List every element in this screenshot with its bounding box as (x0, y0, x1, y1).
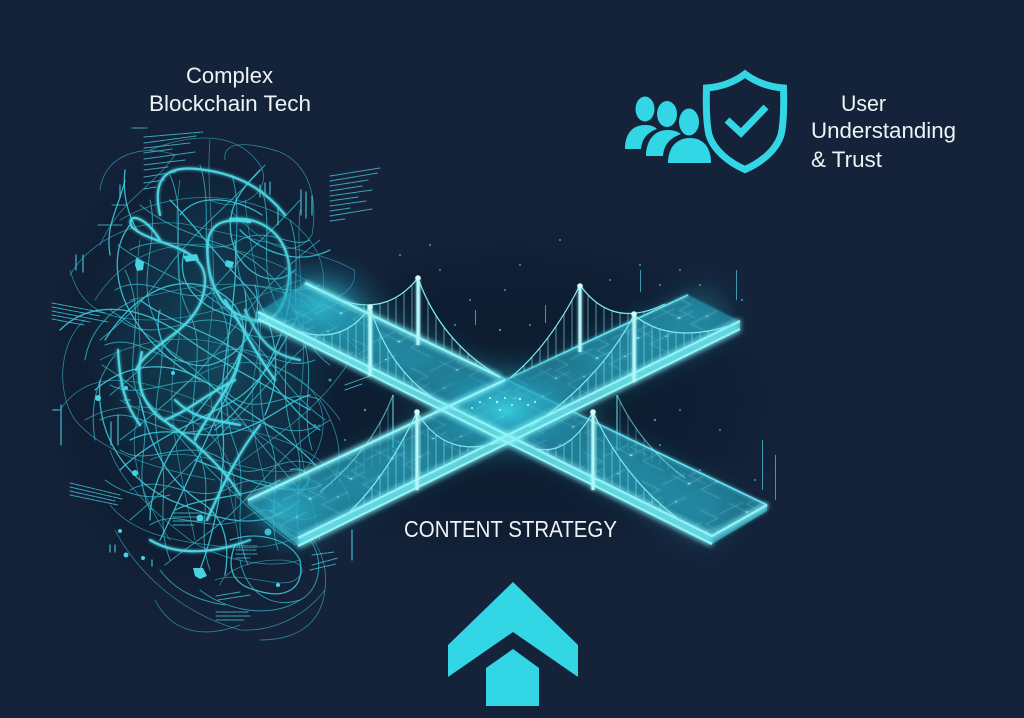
dark halo behind bridge (200, 210, 820, 590)
tower caps (367, 275, 637, 415)
heading: User Understanding & Trust (811, 91, 956, 172)
code text fragments (52, 128, 380, 620)
thin faint strands (60, 138, 360, 640)
pillars behind the decks (393, 395, 617, 450)
heading: Complex Blockchain Tech (149, 63, 311, 116)
suspension cables (288, 278, 732, 520)
hangers between cables and decks (288, 278, 732, 520)
small glyph marks (53, 182, 352, 566)
deck: lower left to upper right (248, 295, 740, 546)
glow: bridge X haze (280, 300, 720, 520)
illustration: tangled blockchain complexity (52, 128, 380, 640)
glow: lower bridge start (215, 455, 355, 565)
heading: User Understanding & Trust: User (841, 91, 886, 116)
deck: upper left to lower right (258, 283, 767, 544)
thick bright strands (118, 168, 300, 551)
dark halo behind tangle (15, 90, 395, 650)
illustration: crossing suspension bridges (248, 239, 776, 546)
heading: User Understanding & Trust: & Trust (811, 147, 882, 172)
rear cable hangers (320, 395, 685, 492)
data nodes (95, 254, 280, 587)
heading: Complex Blockchain Tech: Blockchain Tech (149, 91, 311, 116)
tangle haze (70, 135, 360, 565)
scattered data particles (314, 239, 776, 500)
bright deck edges (248, 283, 767, 546)
glow: bridge crossing (385, 340, 625, 480)
heading: Complex Blockchain Tech: Complex (186, 63, 273, 88)
crossing data cluster (471, 397, 536, 411)
medium strands (60, 170, 330, 594)
icon: upward arrow with house (448, 582, 578, 706)
bridge towers (370, 279, 634, 490)
icon: shield with check (706, 74, 784, 170)
extra dense strands (85, 165, 330, 611)
glow: tangle to bridge junction (235, 245, 405, 365)
heading: User Understanding & Trust: Understanding (811, 118, 956, 143)
label: Content Strategy: CONTENT STRATEGY (404, 516, 617, 542)
icon: user group (625, 96, 711, 163)
